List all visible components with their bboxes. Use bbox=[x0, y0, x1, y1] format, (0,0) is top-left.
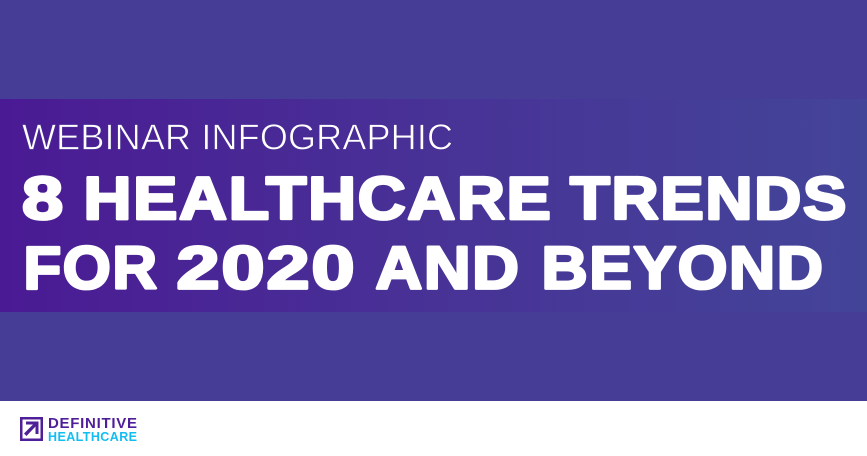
title bbox=[22, 165, 848, 302]
logo wordmark: HEALTHCARE bbox=[48, 430, 137, 444]
heading: webinar infographic: WEBINAR INFOGRAPHIC bbox=[22, 116, 453, 158]
logo wordmark: DEFINITIVE bbox=[48, 415, 137, 432]
title: AND bbox=[376, 234, 520, 302]
logo: Definitive Healthcare bbox=[20, 415, 137, 444]
banner panel bbox=[0, 99, 867, 312]
title: BEYOND bbox=[542, 234, 824, 302]
title: TRENDS bbox=[570, 165, 848, 232]
title: 8 bbox=[22, 165, 65, 232]
logo wordmark bbox=[48, 415, 137, 444]
title: HEALTHCARE bbox=[84, 165, 552, 232]
title: FOR bbox=[24, 234, 158, 302]
title: 2020 bbox=[176, 234, 356, 302]
icon: square with arrow bbox=[20, 417, 43, 441]
